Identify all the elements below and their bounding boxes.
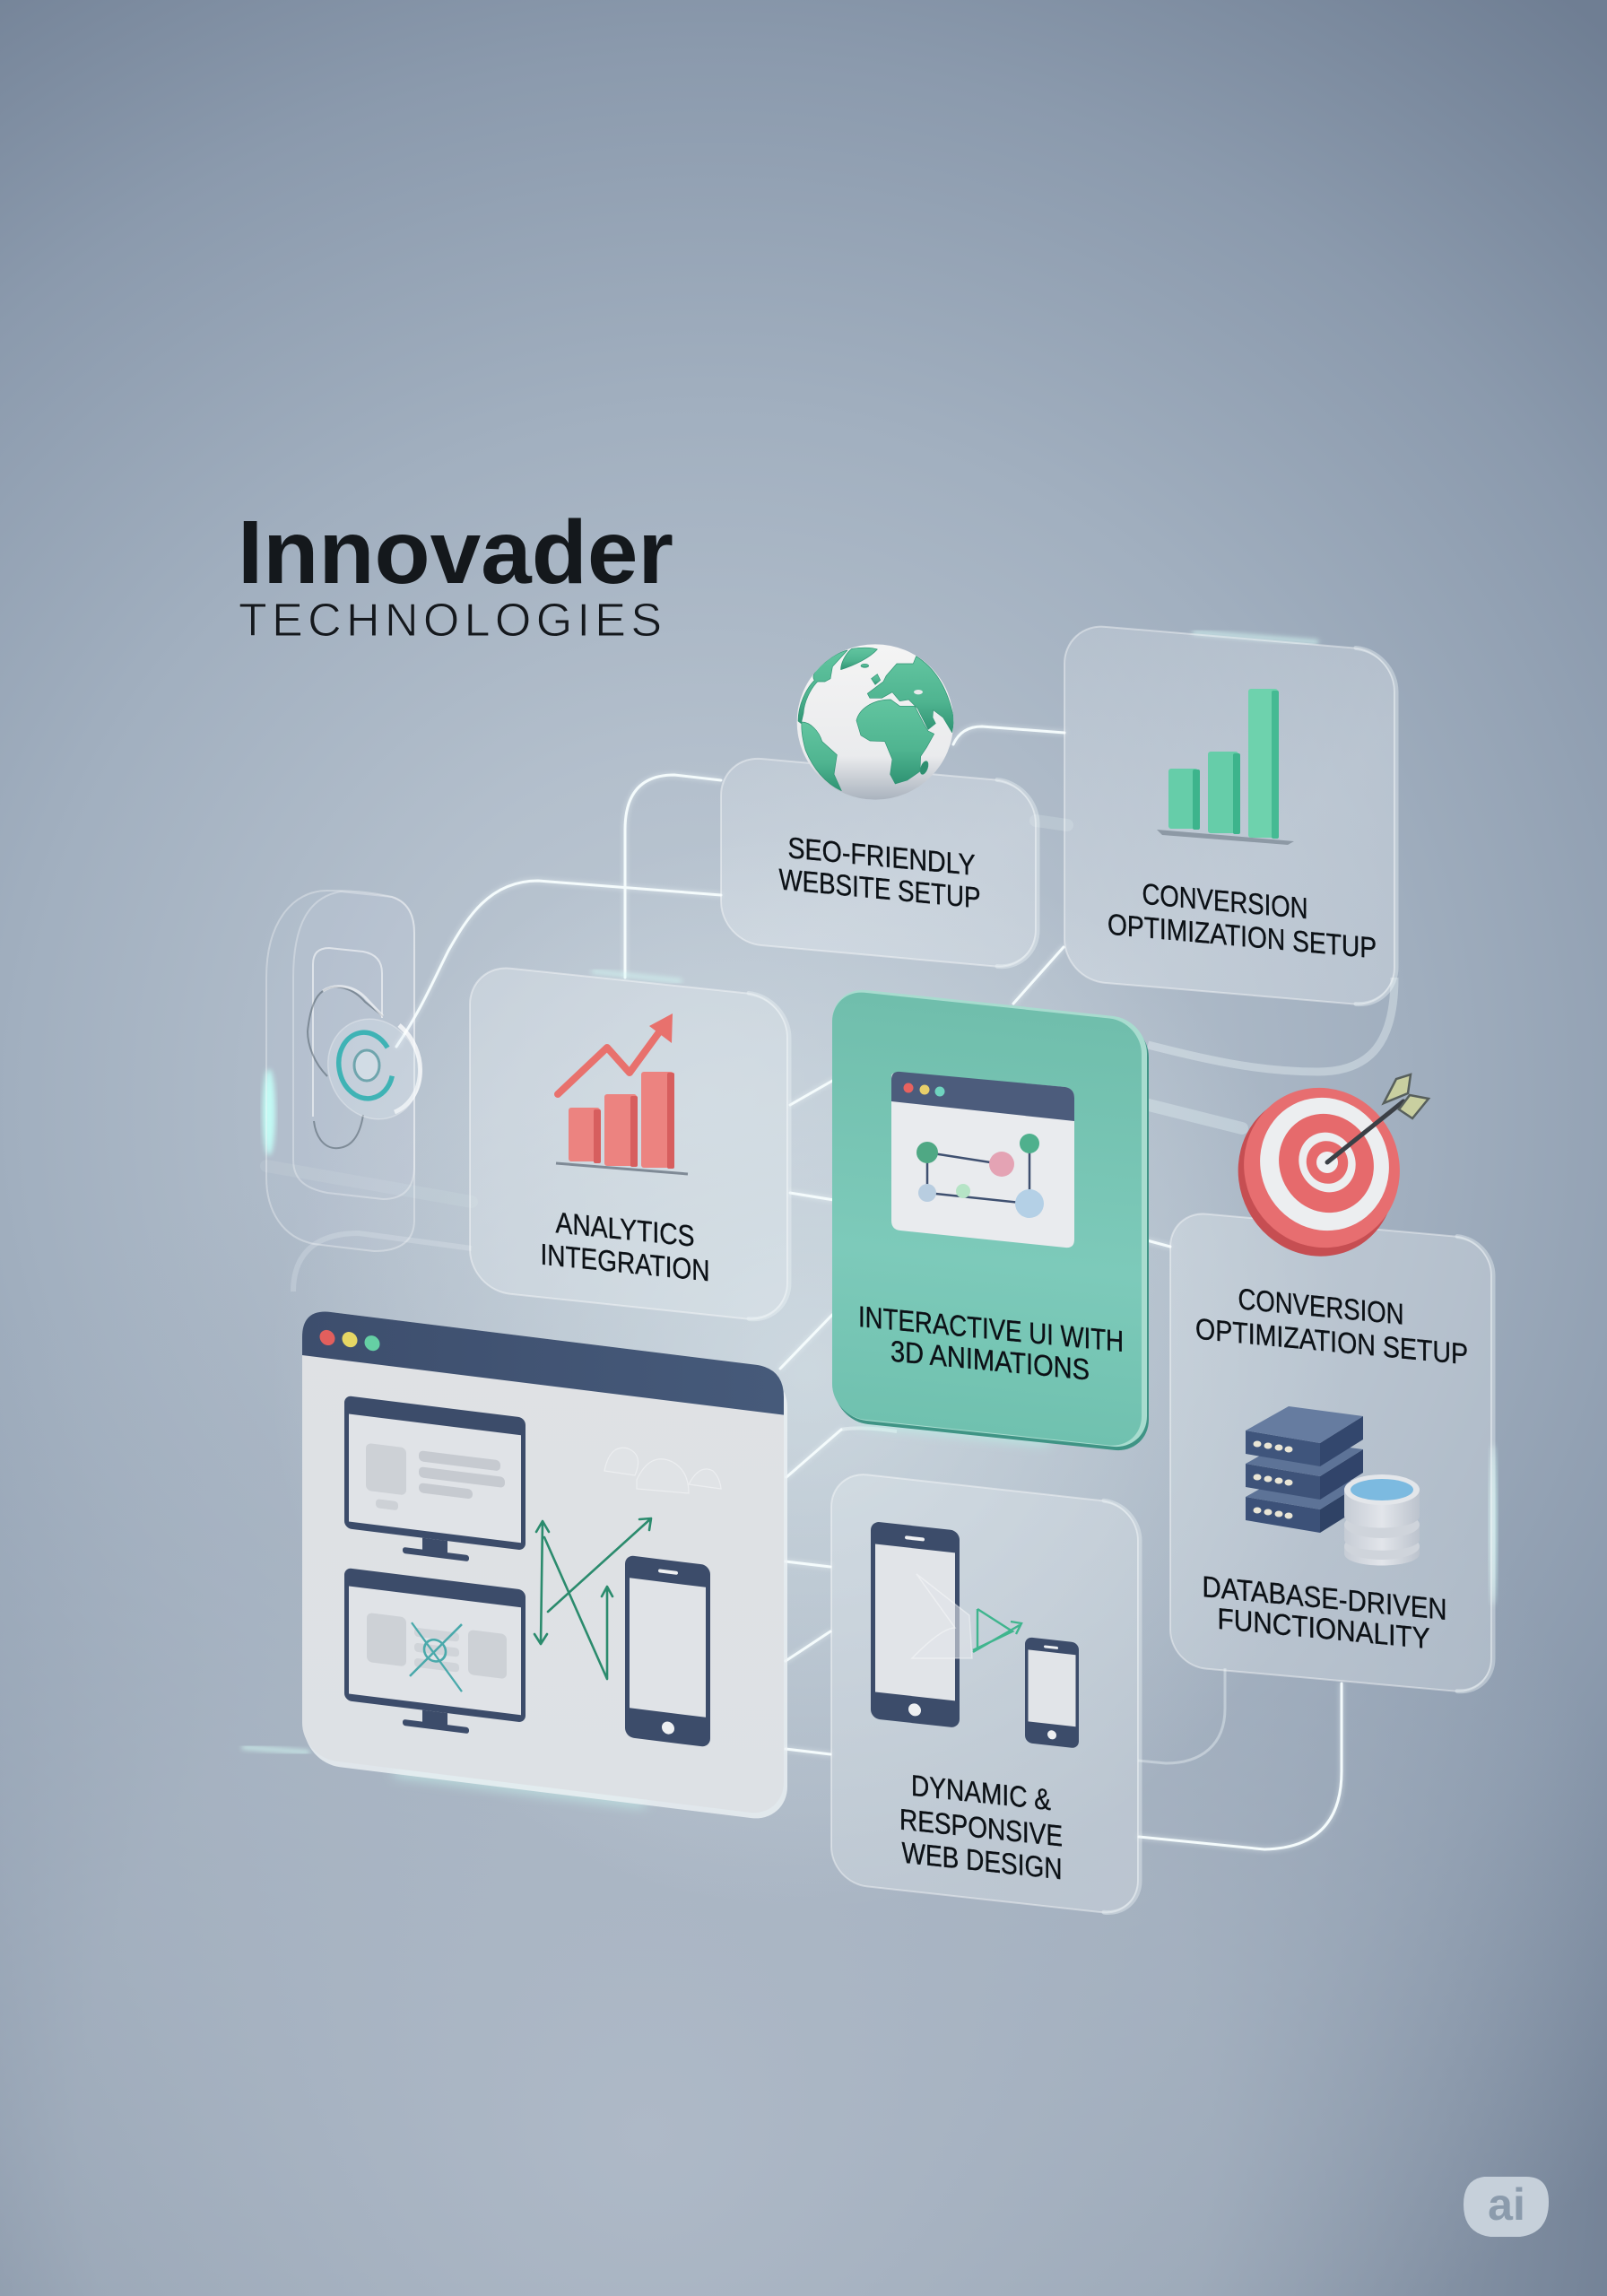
icon: UI window with nodes [891, 1072, 1074, 1248]
icon: green bars [1157, 689, 1294, 845]
label: dynamic [899, 1770, 1063, 1886]
label: interactive UI: INTERACTIVE UI WITH [858, 1300, 1124, 1359]
label: SEO [778, 831, 981, 916]
connector lines between panels [266, 726, 1394, 1849]
label: conversion: CONVERSION [1142, 878, 1307, 926]
panel: SEO-friendly website setup [721, 644, 1038, 970]
icon: target with arrow [1210, 1060, 1429, 1284]
glow highlights [242, 632, 1497, 1803]
panel: large browser window with responsive layouts [302, 1309, 787, 1822]
label: dynamic: DYNAMIC & [911, 1770, 1051, 1817]
panel: conversion optimization setup, bar chart [1064, 623, 1396, 1007]
label: database: DATABASE-DRIVEN [1202, 1570, 1447, 1627]
icon: desktop monitor layout [344, 1396, 526, 1569]
label: dynamic: RESPONSIVE [899, 1804, 1063, 1854]
icon: phone [625, 1555, 710, 1747]
label: database: FUNCTIONALITY [1218, 1603, 1429, 1656]
icon: glass triangle and green arrows [912, 1574, 1021, 1658]
label: SEO: WEBSITE SETUP [778, 863, 981, 916]
label: analytics [540, 1206, 710, 1288]
panel: analytics integration [470, 964, 789, 1323]
title: company logotype [238, 502, 673, 647]
label: conversion: CONVERSION [1238, 1283, 1404, 1332]
icon: phone large [871, 1521, 960, 1728]
label: interactive UI [858, 1300, 1124, 1387]
panel: dynamic and responsive web design [831, 1471, 1140, 1917]
label: conversion [1108, 878, 1377, 965]
label: analytics: INTEGRATION [540, 1239, 710, 1288]
label: analytics: ANALYTICS [556, 1206, 694, 1254]
label: conversion: OPTIMIZATION SETUP [1195, 1313, 1468, 1371]
label: interactive UI: 3D ANIMATIONS [890, 1335, 1090, 1387]
title: company logotype: TECHNOLOGIES [239, 595, 662, 647]
arrows: responsive flow [534, 1518, 651, 1679]
label: dynamic: WEB DESIGN [901, 1837, 1063, 1886]
icon: globe [797, 644, 954, 800]
icon: desktop monitor wireframe [344, 1568, 526, 1741]
icon: faint cloud [604, 1448, 721, 1493]
title: company logotype: Innovader [238, 502, 673, 603]
watermark: ai badge: ai [1488, 2179, 1525, 2230]
panel: conversion and database functionality [1170, 1060, 1493, 1694]
icon: server stack and database cylinder [1246, 1406, 1420, 1566]
icon: glass sensor device [266, 891, 436, 1251]
icon: phone small [1025, 1637, 1079, 1749]
label: conversion: OPTIMIZATION SETUP [1108, 909, 1377, 965]
label: conversion [1195, 1283, 1468, 1371]
label: database [1202, 1570, 1447, 1656]
watermark: ai badge [1464, 2177, 1549, 2237]
panel: interactive UI with 3D animations [832, 987, 1149, 1454]
icon: red analytics chart [556, 1013, 688, 1174]
label: SEO: SEO-FRIENDLY [787, 831, 976, 883]
